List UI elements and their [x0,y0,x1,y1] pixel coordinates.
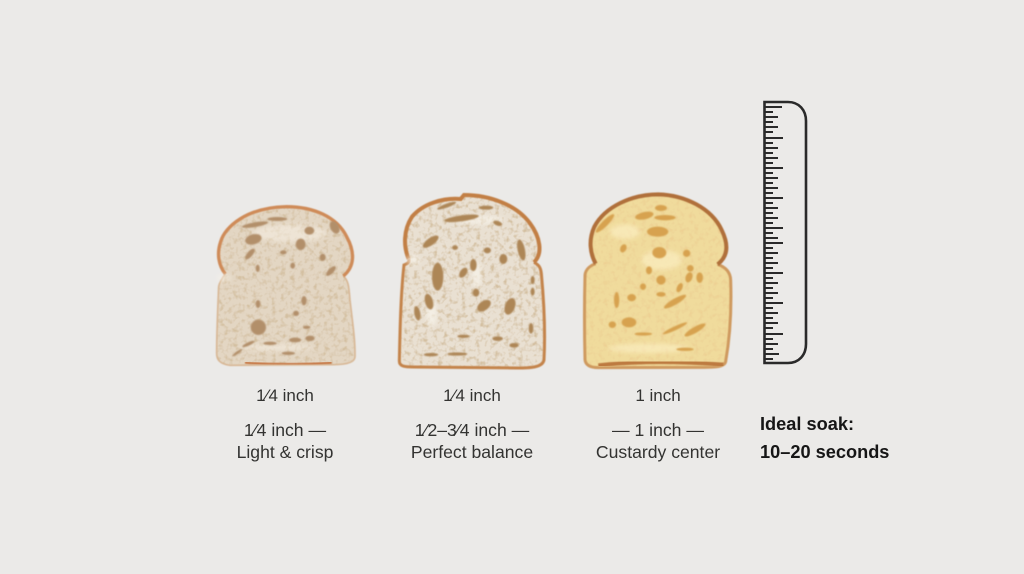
label: thick slice description [596,420,720,462]
icon: ruler [764,102,806,363]
label: medium slice description: Perfect balance [411,442,533,462]
icon: thick golden bread slice [584,194,731,368]
icon: thin bread slice [217,207,355,365]
label: thin slice measure: 1⁄4 inch [256,386,314,405]
icon: medium bread slice [399,195,545,368]
label: medium slice description [411,420,533,462]
label: thick slice measure: 1 inch [635,386,681,405]
label: thick slice description: Custardy center [596,442,720,462]
callout: ideal soak time: Ideal soak: [760,414,854,434]
label: thin slice description: 1⁄4 inch — [244,420,326,440]
label: thick slice description: — 1 inch — [612,420,704,440]
label: thin slice description: Light & crisp [237,442,334,462]
label: thin slice description [237,420,334,462]
callout: ideal soak time: 10–20 seconds [760,442,889,462]
callout: ideal soak time [760,414,889,462]
label: medium slice measure: 1⁄4 inch [443,386,501,405]
label: medium slice description: 1⁄2–3⁄4 inch — [415,420,530,440]
